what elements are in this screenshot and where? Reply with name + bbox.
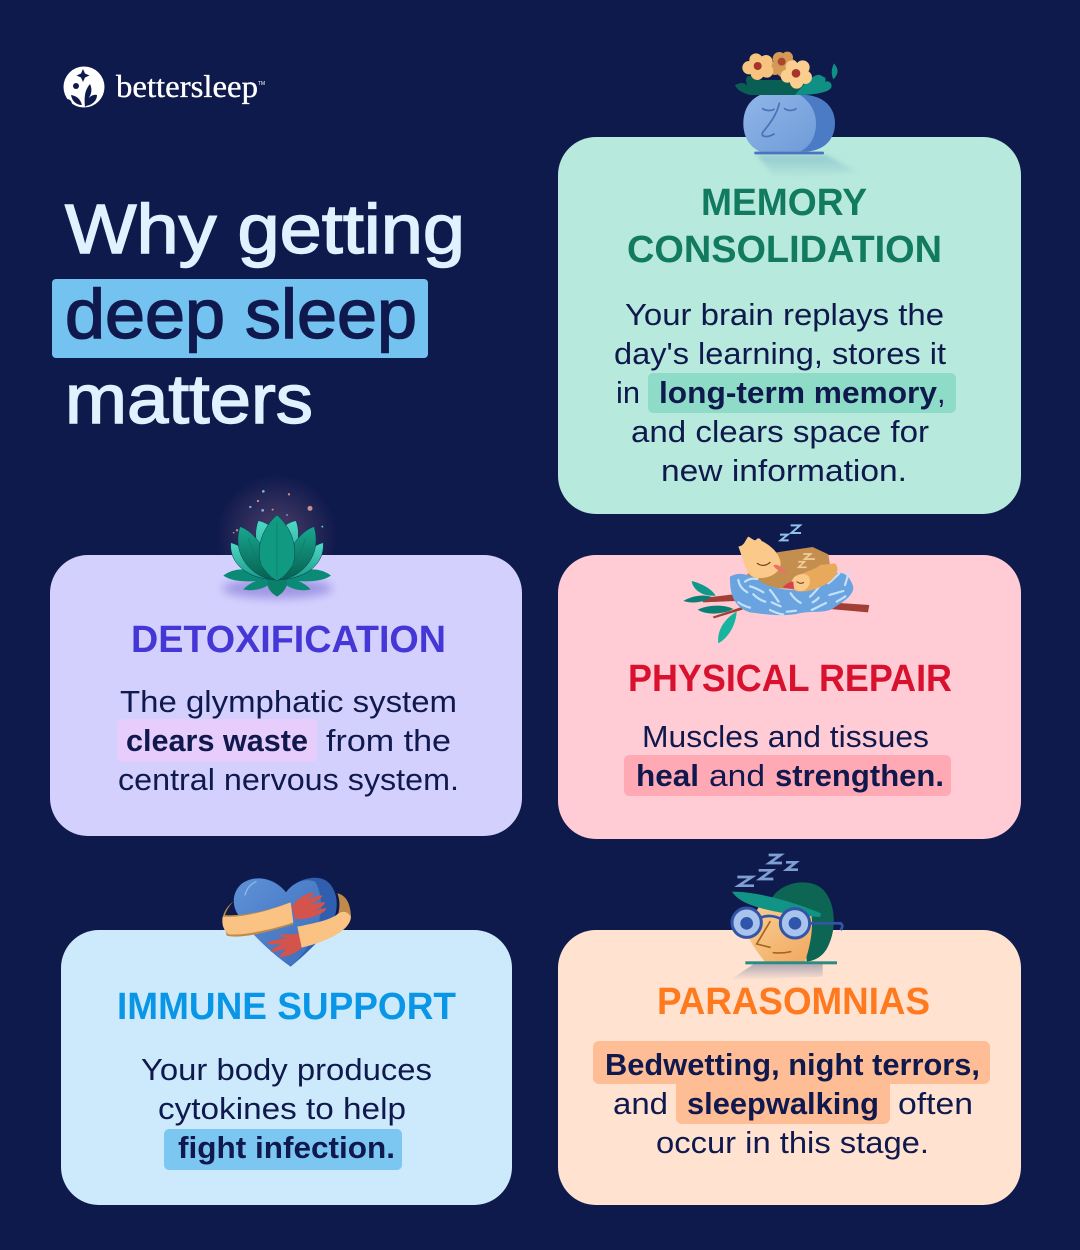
body text: The glymphatic system	[120, 684, 457, 719]
nose and mouth	[757, 922, 791, 953]
leaves	[735, 63, 838, 95]
panel: memory consolidation	[558, 137, 1021, 514]
lotus glow (lower half hidden on the card)	[224, 483, 329, 555]
flowers	[742, 52, 812, 89]
panel: parasomnias	[558, 930, 1021, 1205]
face	[745, 905, 812, 962]
panel: detoxification	[50, 555, 522, 836]
heading: PARASOMNIAS	[657, 981, 930, 1023]
trademark: TM	[258, 81, 265, 87]
body text: occur in this stage.	[656, 1125, 929, 1160]
heading	[627, 182, 942, 271]
highlight: long-term memory	[648, 373, 956, 413]
body text: and	[709, 758, 765, 793]
body text	[636, 719, 944, 793]
body text: long-term memory	[659, 375, 938, 410]
pot body	[743, 95, 835, 154]
icon: sleeping birds in nest	[683, 525, 869, 643]
glasses	[732, 908, 842, 938]
body text: Muscles and tissues	[642, 719, 929, 754]
body text: central nervous system.	[118, 762, 459, 797]
front petals	[238, 515, 316, 581]
nest	[730, 572, 853, 615]
body text	[614, 297, 946, 488]
hands	[267, 892, 327, 958]
icon: heart being hugged	[222, 878, 351, 967]
body text: ,	[937, 375, 946, 410]
body text	[605, 1047, 980, 1160]
highlight: clears waste	[117, 719, 317, 762]
heading: DETOXIFICATION	[131, 619, 446, 661]
zzz	[737, 855, 798, 886]
panel background	[558, 137, 1021, 514]
panel: immune support	[61, 930, 512, 1205]
body text: Your body produces	[141, 1052, 432, 1087]
sleeping face	[762, 103, 796, 136]
base line	[745, 961, 837, 964]
heading: CONSOLIDATION	[627, 229, 942, 271]
body text: clears waste	[126, 723, 308, 758]
body text: fight infection.	[178, 1130, 395, 1165]
heading: PHYSICAL REPAIR	[628, 658, 952, 700]
panel: physical repair	[558, 555, 1021, 839]
title	[52, 190, 465, 438]
panel background	[61, 930, 512, 1205]
branch	[700, 594, 869, 618]
zzz	[780, 525, 801, 540]
highlight: heal and strengthen	[624, 755, 951, 796]
body text: new information.	[661, 453, 907, 488]
back petals	[231, 521, 323, 579]
head shadow	[730, 964, 823, 980]
body text	[118, 684, 459, 797]
title highlight	[52, 279, 428, 358]
leaves	[683, 581, 737, 643]
sparkles	[233, 490, 323, 533]
body text: day's learning, stores it	[614, 336, 946, 371]
petal veins	[248, 522, 306, 578]
heart	[234, 878, 337, 967]
right arm	[337, 893, 351, 917]
title line 1: Why getting	[65, 190, 465, 268]
hat brim	[732, 892, 821, 917]
body text: in	[616, 375, 640, 410]
lower leaves	[223, 569, 331, 597]
heading: MEMORY	[701, 182, 867, 224]
highlight: fight infection	[164, 1129, 402, 1170]
icon: sleepy head with glasses	[730, 855, 842, 980]
body text: Your brain replays the	[625, 297, 944, 332]
hair	[772, 882, 834, 962]
title line 2: deep sleep	[65, 275, 417, 353]
logo wordmark: bettersleep	[116, 68, 258, 104]
small bird	[783, 563, 838, 592]
body text: and clears space for	[631, 414, 929, 449]
icon: logo moon with sprout	[62, 66, 104, 109]
body text: often	[898, 1086, 973, 1121]
panel background	[558, 930, 1021, 1205]
body text: Bedwetting, night terrors,	[605, 1047, 980, 1082]
body text	[141, 1052, 432, 1165]
logo: bettersleep	[62, 66, 265, 109]
body text: strengthen.	[775, 758, 944, 793]
panel background	[50, 555, 522, 836]
icon: sleeping flower pot	[735, 52, 857, 178]
left arm	[223, 902, 293, 937]
body text: cytokines to help	[158, 1091, 406, 1126]
panel background	[558, 555, 1021, 839]
body text: and	[613, 1086, 668, 1121]
body text: heal	[636, 758, 699, 793]
lotus shadow	[222, 578, 332, 598]
highlights: bedwetting and sleepwalking	[593, 1041, 990, 1124]
icon: lotus	[217, 475, 337, 598]
body text: sleepwalking	[687, 1086, 879, 1121]
body text: from the	[326, 723, 451, 758]
heading: IMMUNE SUPPORT	[117, 986, 456, 1028]
title line 3: matters	[65, 360, 313, 438]
large bird	[738, 537, 830, 590]
pot shadow	[757, 155, 857, 178]
